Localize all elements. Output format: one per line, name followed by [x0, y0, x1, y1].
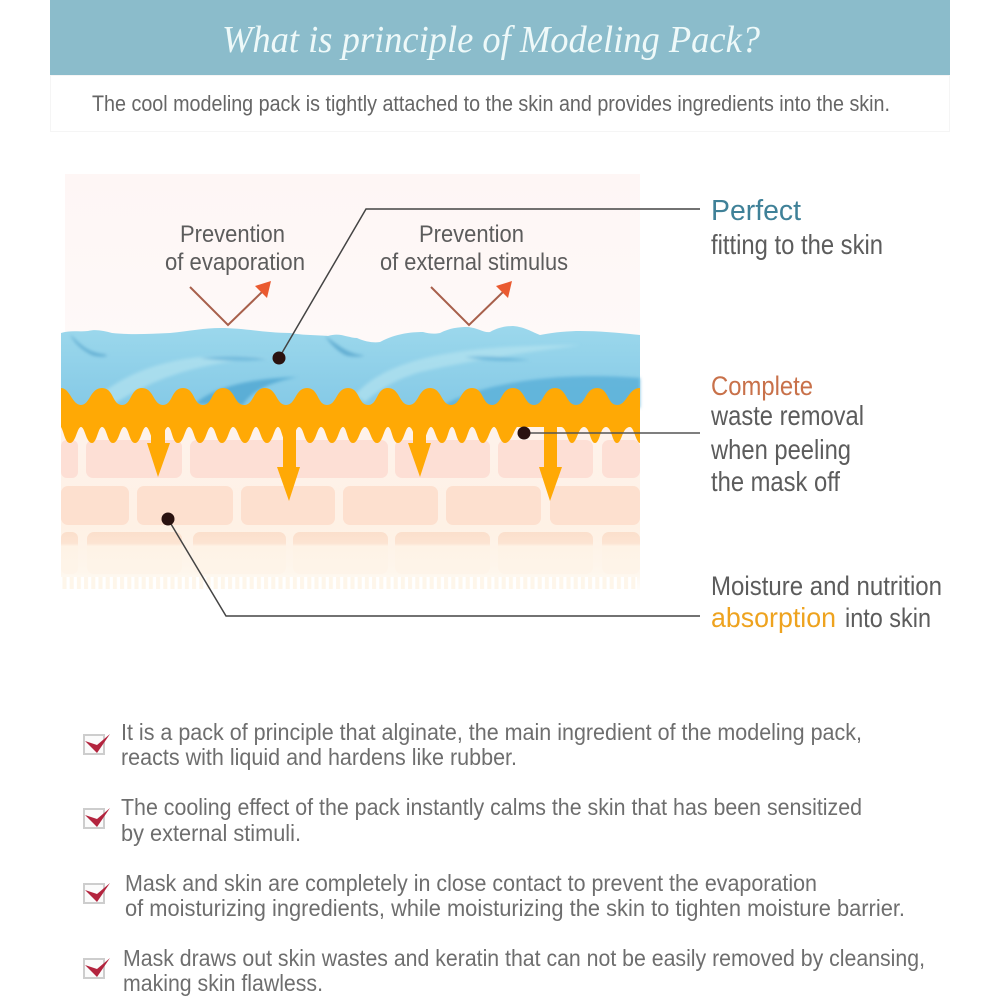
callout: moisture and nutrition absorption — [711, 571, 942, 633]
arrow: absorption 1 — [147, 425, 170, 477]
label: prevention of evaporation: Prevention — [180, 221, 285, 248]
callout: complete waste removal: Complete — [711, 371, 813, 401]
header banner — [50, 0, 950, 75]
intro sentence box — [50, 76, 950, 132]
label: prevention of external stimulus: Prevention — [419, 221, 524, 248]
label: prevention of evaporation — [165, 221, 305, 276]
bullet 2: by external stimuli. — [121, 820, 301, 846]
callout: perfect fitting: Perfect — [711, 195, 801, 227]
icon: check 2 — [84, 808, 110, 828]
icon: check 1 — [84, 734, 110, 754]
icon: check 3 — [84, 883, 110, 903]
bullet 3: Mask and skin are completely in close contact to prevent the evaporation — [125, 870, 817, 896]
arrow: absorption 2 — [277, 425, 300, 501]
callout: complete waste removal: when peeling — [710, 434, 851, 465]
callout: complete waste removal: waste removal — [710, 400, 864, 431]
callout: moisture and nutrition absorption: Moisture and nutrition — [711, 571, 942, 601]
bullet 4: Mask draws out skin wastes and keratin that can not be easily removed by cleansing, — [123, 945, 925, 971]
skin structure diagram — [61, 174, 640, 591]
callout: complete waste removal — [710, 371, 864, 497]
arrow: evaporation bounce — [190, 281, 271, 325]
upper background panel — [65, 174, 640, 344]
callout: moisture and nutrition absorption: into skin — [845, 603, 931, 633]
callout: moisture and nutrition absorption: absorption — [711, 602, 836, 633]
leader line: perfect fit — [272, 209, 700, 364]
skin cell layers — [61, 410, 640, 591]
label: prevention of external stimulus — [380, 221, 568, 276]
leader line: waste removal — [518, 426, 700, 440]
leader line: absorption — [162, 512, 700, 616]
bullet 1 — [84, 719, 862, 770]
blue modeling pack layer — [61, 326, 640, 410]
callout: perfect fitting: fitting to the skin — [711, 229, 883, 260]
bullet 3 — [84, 870, 905, 921]
bullet 1: It is a pack of principle that alginate, the main ingredient of the modeling pack, — [121, 719, 862, 745]
title: What is principle of Modeling Pack? — [222, 19, 760, 61]
callout: complete waste removal: the mask off — [711, 466, 840, 497]
bullet 1: reacts with liquid and hardens like rubber. — [121, 744, 517, 770]
arrow: absorption 3 — [408, 425, 431, 477]
arrow: absorption 4 — [539, 425, 562, 501]
arrow: stimulus bounce — [431, 281, 512, 325]
label: prevention of evaporation: of evaporation — [165, 249, 305, 276]
bullet 2 — [84, 794, 862, 846]
bullet list — [84, 719, 925, 996]
orange waste-removal layer — [61, 388, 640, 443]
label: prevention of external stimulus: of external stimulus — [380, 249, 568, 276]
bullet 4: making skin flawless. — [123, 970, 323, 996]
bullet 4 — [84, 945, 925, 996]
callout: perfect fitting — [711, 195, 883, 260]
bullet 3: of moisturizing ingredients, while moisturizing the skin to tighten moisture barrier. — [125, 895, 905, 921]
intro sentence: The cool modeling pack is tightly attached to the skin and provides ingredients into the skin. — [92, 91, 890, 116]
icon: check 4 — [84, 958, 110, 978]
bullet 2: The cooling effect of the pack instantly calms the skin that has been sensitized — [121, 794, 862, 820]
